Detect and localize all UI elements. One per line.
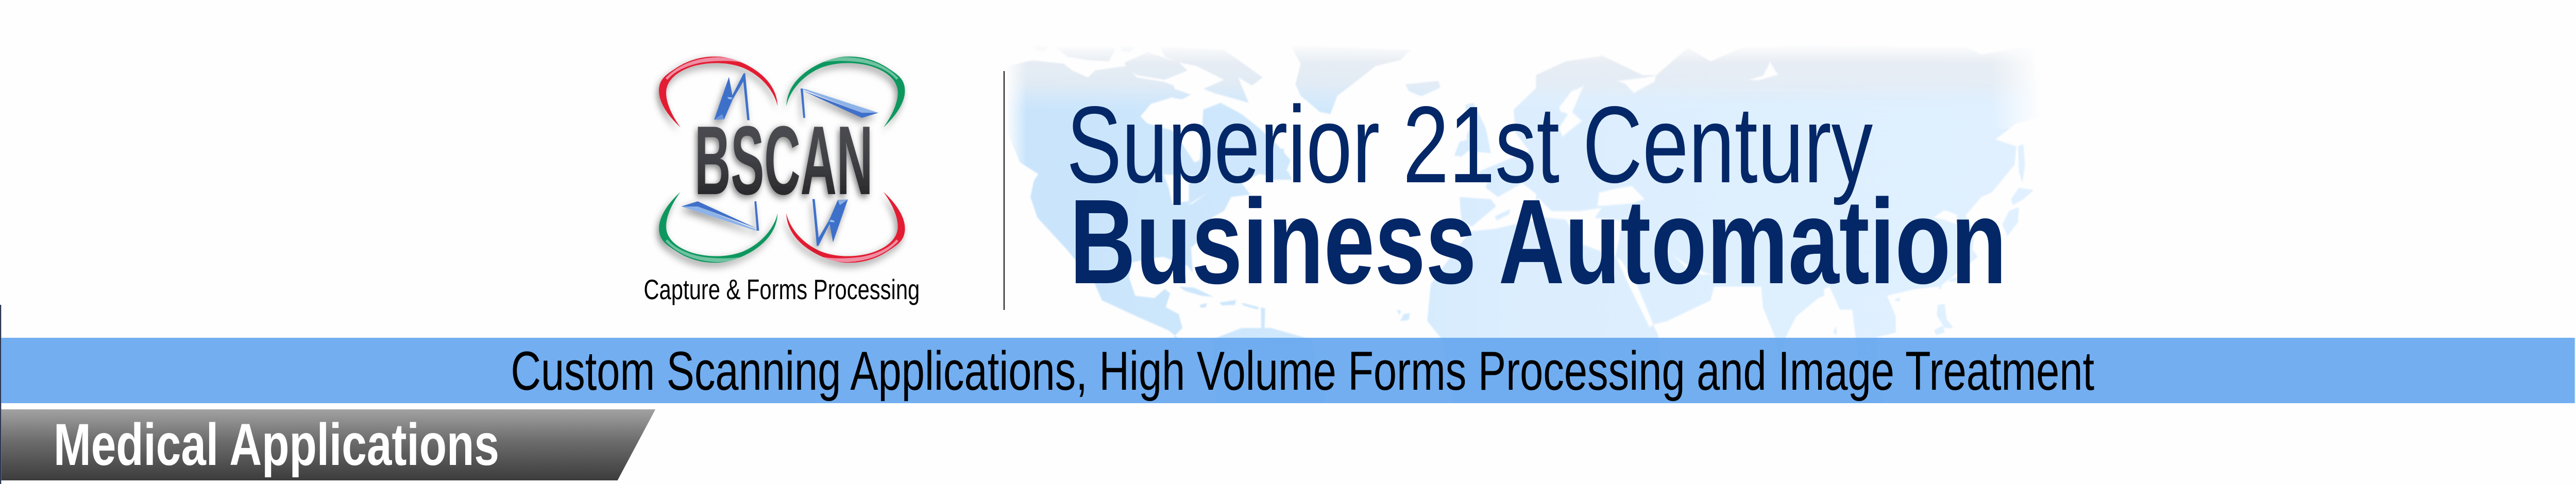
logo: BSCAN bbox=[659, 57, 905, 263]
title line one: Superior 21st Century bbox=[1066, 84, 1873, 205]
left edge line bbox=[0, 305, 1, 484]
logo wordmark: BSCAN bbox=[694, 106, 873, 215]
tagline band bbox=[1, 338, 2575, 403]
tab label: Medical Applications bbox=[54, 411, 499, 478]
section tab: Medical Applications bbox=[1, 409, 655, 480]
world map background bbox=[1009, 50, 2033, 338]
tagline text: Custom Scanning Applications, High Volume Forms Processing and Image Treatment bbox=[511, 340, 2094, 402]
logo caption: Capture & Forms Processing bbox=[643, 274, 920, 305]
title line two: Business Automation bbox=[1070, 175, 2007, 309]
tab shape bbox=[1, 409, 655, 480]
vertical divider bbox=[1004, 71, 1005, 310]
logo arcs: red and green crescents bbox=[659, 57, 905, 263]
logo blue corner marks bbox=[681, 73, 878, 246]
